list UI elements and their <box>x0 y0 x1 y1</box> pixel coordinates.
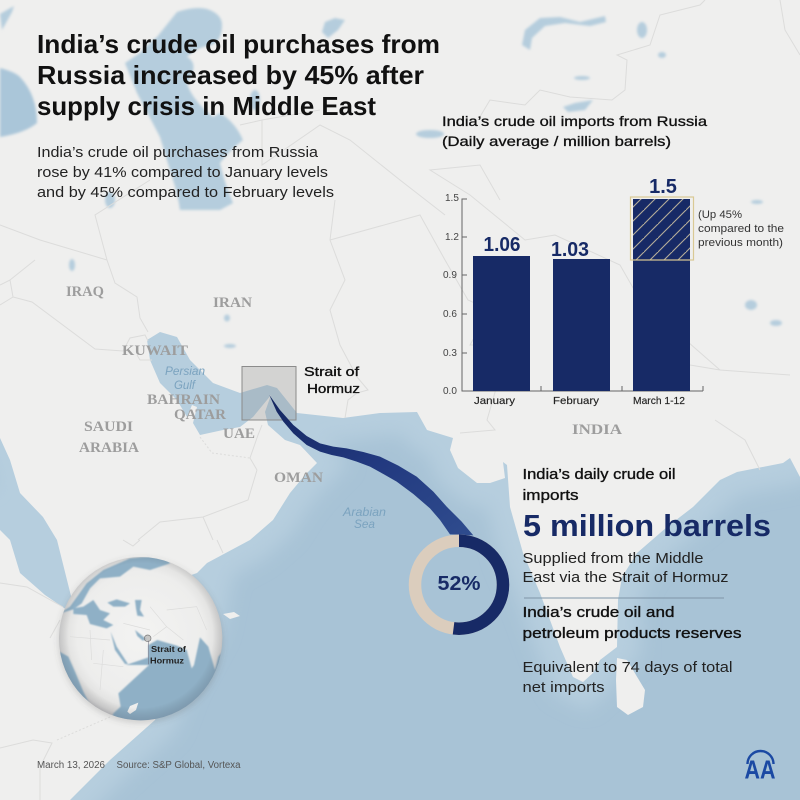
country labels: KUWAIT <box>122 343 188 359</box>
y axis labels: 0.6 <box>443 309 457 320</box>
country labels <box>66 284 622 486</box>
country labels: IRAQ <box>66 284 104 300</box>
sea labels: Persian <box>165 364 205 378</box>
subtitle text: India’s crude oil purchases from Russia <box>37 145 319 161</box>
footer date and source: Source: S&P Global, Vortexa <box>116 760 241 771</box>
strait label <box>304 364 360 396</box>
inland seas and lakes <box>0 6 782 348</box>
subtitle text: and by 45% compared to February levels <box>37 185 334 201</box>
bar: March 1-12 <box>633 199 690 391</box>
month labels: January <box>474 395 516 407</box>
chart note: previous month) <box>698 237 783 249</box>
sea labels: Gulf <box>174 378 197 392</box>
text block: daily imports: imports <box>522 488 578 504</box>
globe inset: Hormuz <box>150 656 184 666</box>
country labels: ARABIA <box>79 440 139 456</box>
sea labels: Arabian <box>342 505 386 519</box>
bar chart <box>443 176 784 407</box>
text block: daily imports <box>522 467 771 586</box>
text block: reserves: petroleum products reserves <box>522 626 742 642</box>
country labels: UAE <box>223 426 255 442</box>
country labels: INDIA <box>572 422 622 438</box>
text block: daily imports: Supplied from the Middle <box>522 551 704 567</box>
logo: Anadolu Agency: AA <box>744 754 776 784</box>
flow arrow ribbon <box>269 395 473 535</box>
country labels: BAHRAIN <box>147 392 220 408</box>
strait label: Hormuz <box>307 381 360 396</box>
text block: reserves: net imports <box>522 680 604 696</box>
country labels: QATAR <box>174 407 226 423</box>
donut chart 52%: 52% <box>438 573 481 595</box>
chart axes <box>462 199 703 391</box>
title <box>37 29 440 121</box>
chart heading <box>442 113 707 149</box>
strait label: Strait of <box>304 364 359 379</box>
strait locator box <box>242 366 296 420</box>
text block: daily imports: India’s daily crude oil <box>522 467 676 483</box>
value labels: 1.03 <box>551 239 589 261</box>
country labels: IRAN <box>213 295 252 311</box>
sea labels <box>165 364 386 531</box>
title: supply crisis in Middle East <box>37 91 376 121</box>
text block: daily imports: 5 million barrels <box>523 508 771 543</box>
globe inset <box>55 555 227 727</box>
country labels: OMAN <box>274 470 323 486</box>
donut chart 52% <box>415 541 503 629</box>
title: India’s crude oil purchases from <box>37 29 440 59</box>
subtitle text <box>37 145 334 201</box>
country labels: SAUDI <box>84 419 133 435</box>
footer date and source: March 13, 2026 <box>37 760 105 771</box>
chart note: (Up 45% <box>698 209 742 221</box>
globe inset: Strait of <box>151 644 186 654</box>
y axis labels: 0.0 <box>443 386 457 397</box>
month labels <box>474 395 685 407</box>
chart heading: India’s crude oil imports from Russia <box>442 113 707 129</box>
text block: reserves <box>522 605 742 696</box>
y axis labels: 0.3 <box>443 348 457 359</box>
y axis labels: 1.2 <box>445 232 459 243</box>
chart heading: (Daily average / million barrels) <box>442 133 671 149</box>
text block: daily imports: East via the Strait of Hormuz <box>522 570 728 586</box>
chart note: compared to the <box>698 223 784 235</box>
bar: February <box>553 259 610 391</box>
sea labels: Sea <box>354 517 375 531</box>
subtitle text: rose by 41% compared to January levels <box>37 165 328 181</box>
text block: reserves: India’s crude oil and <box>522 605 674 621</box>
hatched increase <box>630 197 694 260</box>
footer date and source <box>37 760 241 771</box>
value labels: 1.06 <box>484 234 520 256</box>
chart note <box>698 209 784 249</box>
bar: January <box>473 256 530 391</box>
y axis labels: 0.9 <box>443 270 457 281</box>
y axis labels: 1.5 <box>445 193 459 204</box>
value labels <box>484 176 677 261</box>
y axis labels <box>443 193 459 397</box>
month labels: February <box>553 395 600 407</box>
value labels: 1.5 <box>649 176 677 198</box>
text block: reserves: Equivalent to 74 days of total <box>522 660 732 676</box>
month labels: March 1-12 <box>633 395 685 407</box>
title: Russia increased by 45% after <box>37 60 424 90</box>
